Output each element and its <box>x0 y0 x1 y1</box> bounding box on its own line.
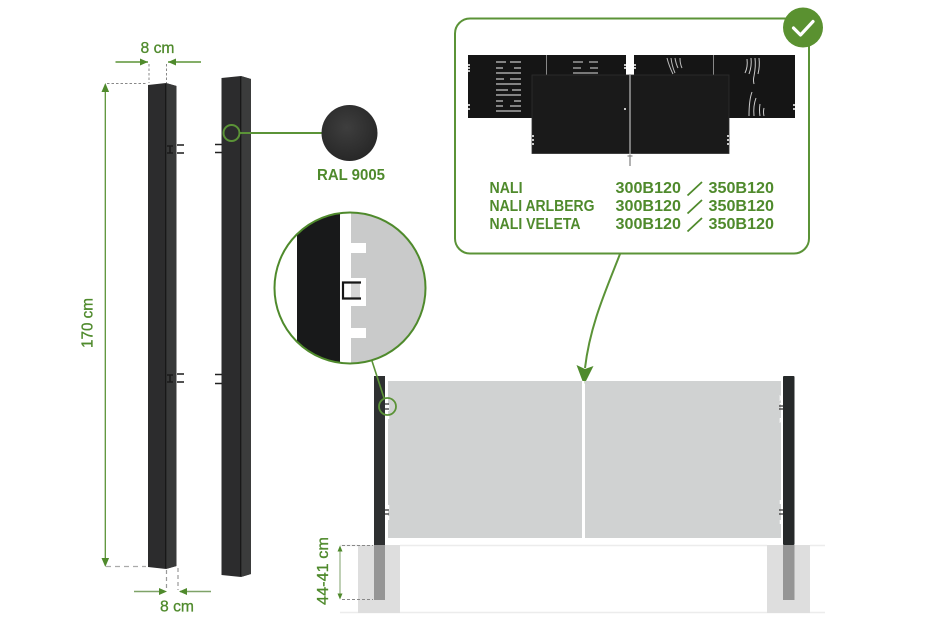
colour swatch: RAL 9005 <box>317 105 385 184</box>
model list: 350B120 <box>708 216 774 233</box>
clips: upper post clip <box>167 145 184 153</box>
model list: 300B120 <box>616 180 681 197</box>
dimension: height 170 cm <box>80 83 147 567</box>
model list: 300B120 <box>616 198 681 215</box>
fence post: right <box>783 376 794 600</box>
model list: 300B120 <box>616 216 681 233</box>
ground and concrete foundations <box>340 545 825 613</box>
icon: check badge <box>783 8 823 48</box>
dimension: height 170 cm: 170 cm <box>80 298 96 348</box>
callout: product models <box>455 18 809 254</box>
model list: NALI VELETA <box>490 216 581 233</box>
model list: NALI <box>490 180 522 197</box>
model list <box>490 180 774 233</box>
colour swatch: RAL 9005: RAL 9005 <box>317 167 385 184</box>
model list: 350B120 <box>708 180 774 197</box>
dimension: top width 8 cm: 8 cm <box>140 40 174 57</box>
gate panel <box>384 381 784 538</box>
dimension: foundation depth 44-41 cm: 44-41 cm <box>315 537 332 605</box>
magnifier pointer to clip <box>372 361 396 415</box>
dimension: bottom width 8 cm <box>134 568 211 616</box>
fence post: left <box>374 376 385 600</box>
clips: lower post clip <box>167 374 184 382</box>
dimension: top width 8 cm <box>116 40 201 83</box>
dimension: bottom width 8 cm: 8 cm <box>160 598 194 616</box>
model list: 350B120 <box>708 198 774 215</box>
colour marker line <box>224 125 323 141</box>
post: side view with colour marker <box>215 76 251 577</box>
arrow: callout to gate <box>576 254 620 385</box>
product image: gate panels <box>468 55 795 166</box>
model list: NALI ARLBERG <box>490 198 594 215</box>
magnifier: clip detail <box>270 208 431 368</box>
post: front view with dimensions <box>148 83 184 569</box>
dimension: foundation depth 44-41 cm <box>315 537 373 605</box>
